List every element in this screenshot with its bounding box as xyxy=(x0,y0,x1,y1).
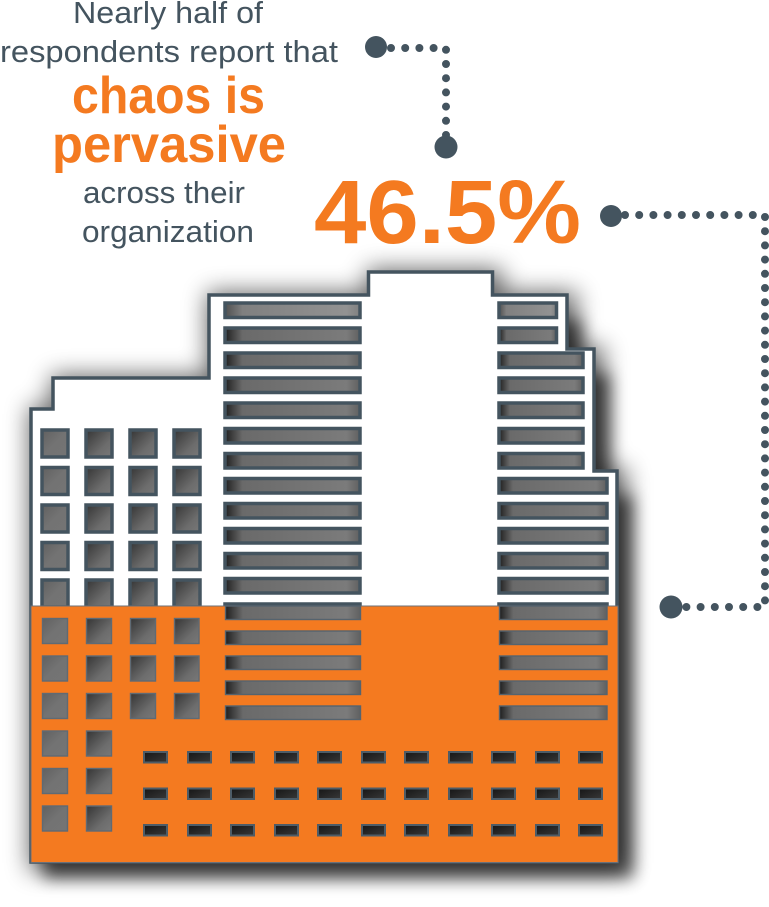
heading: chaos is pervasive xyxy=(52,67,286,174)
small dark windows on the ground floors xyxy=(144,752,602,836)
text block: nearly half of respondents report that xyxy=(0,0,338,69)
square windows in the orange fill xyxy=(42,618,199,831)
connector: statistic to building fill level xyxy=(600,205,765,618)
text block: across their organization: organization xyxy=(82,214,254,249)
text block: across their organization: across their xyxy=(83,175,245,210)
text block: nearly half of respondents report that: respondents report that xyxy=(0,34,338,69)
building illustration xyxy=(31,272,633,878)
right strip windows above the fill line xyxy=(499,303,607,618)
centre-left strip windows above the fill line xyxy=(225,303,360,618)
connector: text to statistic xyxy=(365,36,458,158)
statistic: 46.5%: 46.5% xyxy=(314,163,581,263)
building shadow xyxy=(35,275,633,878)
orange fill at 46.5 percent xyxy=(31,606,618,862)
square windows above the fill line xyxy=(42,430,200,607)
text block: across their organization xyxy=(82,175,254,249)
heading: chaos is pervasive: chaos is xyxy=(72,67,265,125)
heading: chaos is pervasive: pervasive xyxy=(52,116,286,174)
building outline xyxy=(31,272,617,862)
strip windows in the orange fill xyxy=(226,606,607,720)
